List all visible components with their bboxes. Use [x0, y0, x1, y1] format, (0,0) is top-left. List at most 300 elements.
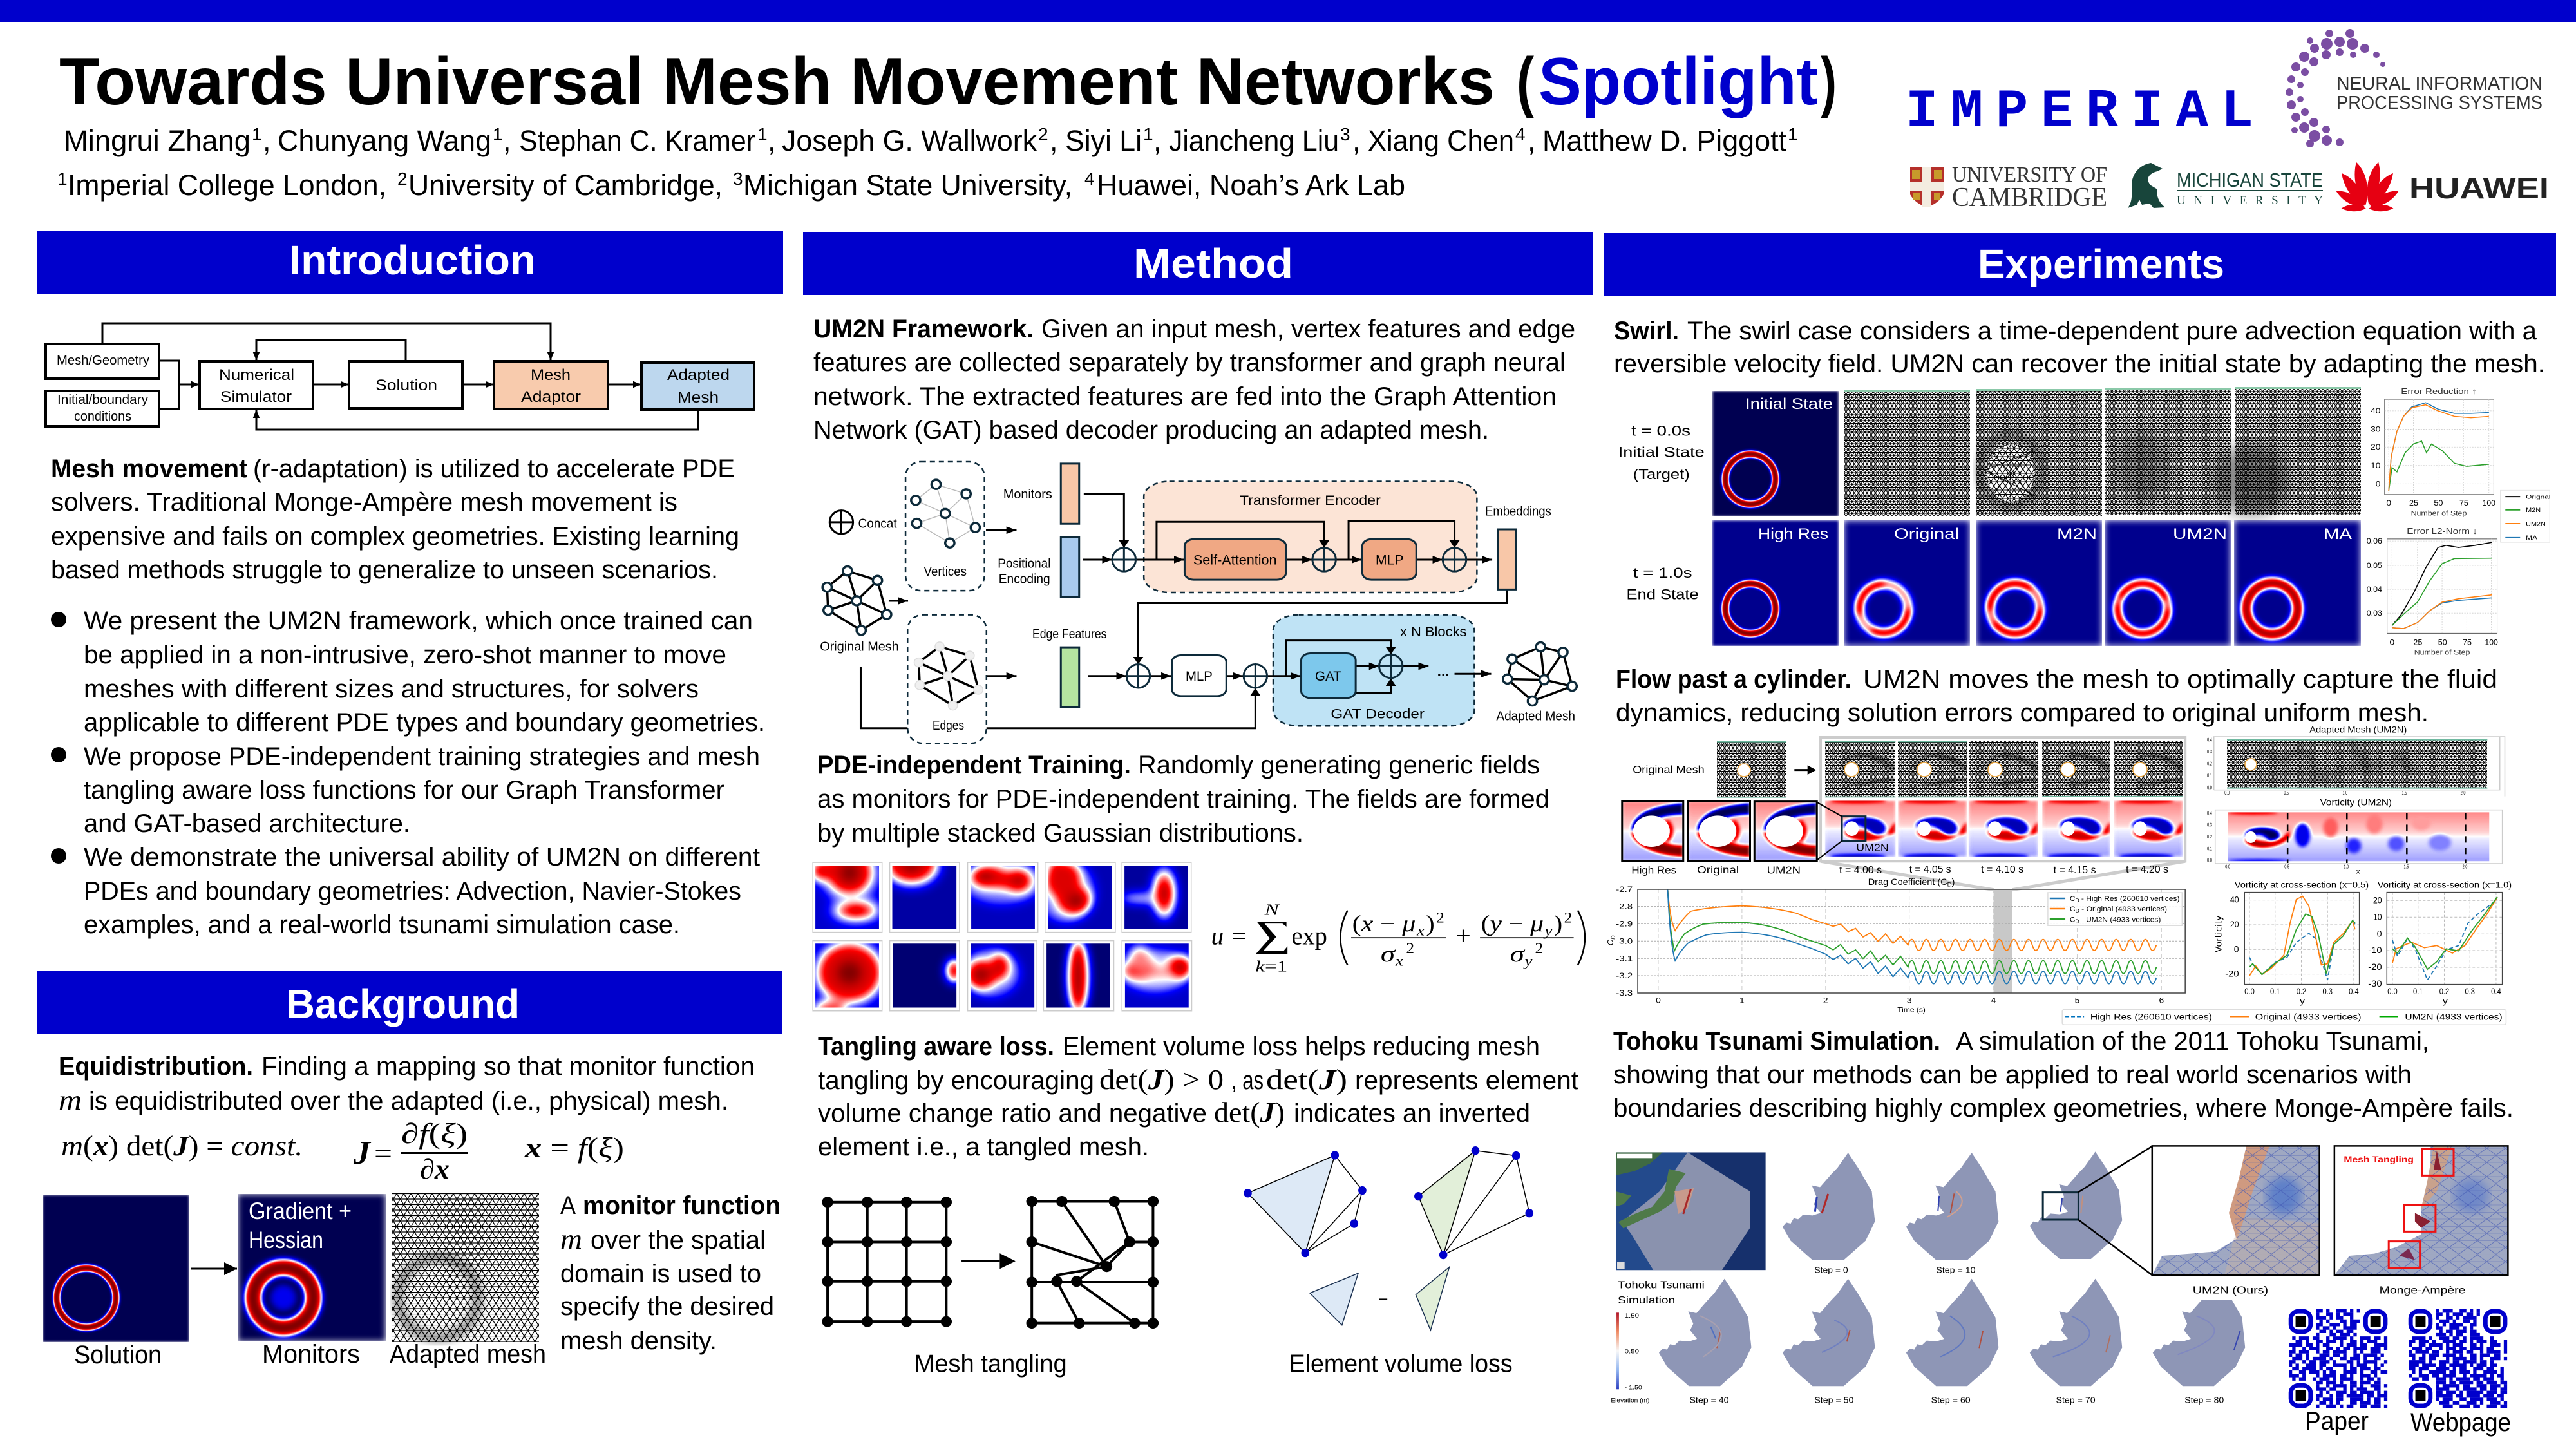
- diagram: mesh movement pipeline: conditions: [74, 410, 131, 424]
- diagram: mesh tangling: Mesh tangling: [914, 1349, 1067, 1378]
- row labels: Initial State: [1618, 444, 1705, 460]
- text block: PDE-independent training: PDE-independent Training.: [817, 751, 1131, 779]
- text block: mesh movement intro: [51, 455, 739, 584]
- equation: stacked Gaussian: 2: [1406, 940, 1414, 957]
- chart: vorticity at x=1.0: 20: [2373, 895, 2382, 905]
- map: Japan domain: [1616, 1152, 1766, 1270]
- chart: vorticity at x=1.0: y: [2443, 996, 2448, 1006]
- vorticity snapshots: [1825, 799, 2183, 858]
- text block: mesh movement intro: (r-adaptation) is utilized to accelerate PDE: [253, 455, 735, 483]
- chart: error L2 norm: 0.05: [2367, 561, 2382, 570]
- text block: Tohoku tsunami: [1613, 1027, 2514, 1122]
- diagram labels: x N Blocks: [1400, 625, 1467, 639]
- affiliations: 3: [733, 169, 743, 189]
- text block: UM2N framework: features are collected separately by transformer and graph neural: [813, 348, 1566, 377]
- panel: Monge-Ampere zoom: [2334, 1146, 2508, 1296]
- image row: swirl end states: High Res: [1758, 526, 1828, 543]
- equation: stacked Gaussian: 2: [1436, 909, 1444, 926]
- chart: vorticity at x=0.5: -20: [2225, 969, 2239, 979]
- step labels: Step = 60: [1931, 1396, 1971, 1405]
- equation: stacked Gaussian: 2: [1564, 909, 1572, 926]
- chart: error reduction: 20: [2371, 442, 2380, 451]
- figures: tsunami simulation: Elevation (m): [1611, 1397, 1649, 1404]
- chart: drag coefficient: -3.3: [1616, 989, 1633, 998]
- image: monitors field: Hessian: [249, 1227, 323, 1253]
- snapshot labels: Original: [1697, 864, 1739, 876]
- authors: ,: [768, 124, 776, 157]
- text block: swirl: [1614, 317, 2545, 378]
- authors: 1: [252, 124, 262, 144]
- chart: vorticity at x=0.5: 0.4: [2349, 987, 2359, 996]
- plot: vorticity long domain: 2.0: [2463, 864, 2467, 869]
- text block: UM2N framework: network. The extracted features are fed into the Graph Attention: [813, 383, 1557, 411]
- diagram: mesh movement pipeline: Adapted: [667, 366, 730, 384]
- text block: contribution bullets: meshes with different sizes and structures, for solvers: [84, 675, 699, 703]
- plot: adapted mesh long domain: 0.1: [2207, 773, 2212, 779]
- logo: Michigan State: MICHIGAN STATE: [2177, 169, 2323, 191]
- icon: original mesh: Original Mesh: [820, 640, 899, 654]
- chart: drag coefficient: 4: [1991, 996, 1996, 1005]
- figures and charts: flow past a cylinder: UM2N: [1856, 842, 1889, 853]
- QR code: webpage: Webpage: [2410, 1408, 2511, 1437]
- text block: UM2N framework: UM2N Framework.: [813, 315, 1034, 343]
- heading: Introduction: [37, 231, 783, 294]
- plot: vorticity long domain: 0.1: [2207, 846, 2212, 851]
- plot: adapted mesh long domain: 0.0: [2207, 784, 2212, 790]
- image row: swirl meshes: [1844, 387, 2361, 516]
- text block: tangling aware loss: [818, 1032, 1578, 1161]
- chart: drag coefficient: D: [2075, 918, 2079, 924]
- plot: adapted mesh long domain: Adapted Mesh (UM2N): [2309, 724, 2407, 735]
- plot: vorticity long domain: 0.5: [2284, 864, 2289, 869]
- text block: flow past a cylinder: dynamics, reducing solution errors compared to original uniform mesh.: [1616, 699, 2429, 727]
- row labels: t = 0.0s: [1631, 423, 1690, 439]
- chart: vorticity at x=0.5: 40: [2230, 895, 2239, 905]
- chart: drag coefficient: -2.7: [1616, 885, 1633, 894]
- chart: vorticity at x=1.0: 0: [2377, 929, 2382, 939]
- equations: equidistribution: [61, 1118, 624, 1185]
- text block: PDE-independent training: as monitors for PDE-independent training. The fields are formed: [817, 785, 1549, 813]
- chart: drag coefficient: C: [1605, 940, 1615, 945]
- figures and charts: flow past a cylinder: - Original (4933 vertices): [2079, 905, 2167, 913]
- diagram: element volume loss: Element volume loss: [1289, 1349, 1513, 1378]
- authors: Joseph G. Wallwork: [782, 124, 1037, 157]
- authors: ,: [1528, 124, 1536, 157]
- equation: stacked Gaussian: x: [1395, 952, 1403, 969]
- diagram labels: Embeddings: [1485, 504, 1551, 518]
- title: ): [1821, 44, 1837, 119]
- text block: mesh movement intro: Mesh movement: [51, 455, 247, 483]
- heading: Background: [37, 971, 782, 1034]
- chart: vorticity at x=1.0: -30: [2368, 979, 2382, 989]
- equation: stacked Gaussian: y: [1543, 922, 1553, 939]
- text block: swirl: reversible velocity field. UM2N can recover the initial state by adapting the mesh.: [1614, 350, 2545, 378]
- panel: transformer encoder: [1144, 481, 1477, 592]
- logo: Imperial: IMPERIAL: [1906, 82, 2253, 143]
- diagram labels: Monitors: [1003, 488, 1052, 502]
- equation: stacked Gaussian: (x − μ: [1352, 911, 1416, 936]
- chart: vorticity at x=0.5: 0.0: [2244, 987, 2255, 996]
- authors: Chunyang Wang: [278, 124, 491, 157]
- text block: monitor function: domain is used to: [560, 1260, 761, 1288]
- chart: drag coefficient: C: [2070, 895, 2085, 903]
- diagram: mesh movement pipeline: [46, 323, 754, 430]
- chart: error reduction: 10: [2371, 461, 2380, 469]
- chart: vorticity at x=0.5: Vorticity: [2214, 915, 2224, 952]
- chart: error L2 norm: 100: [2485, 638, 2498, 647]
- icon: concat symbol: [829, 511, 897, 534]
- text block: contribution bullets: be applied in a non-intrusive, zero-shot manner to move: [84, 641, 726, 669]
- chart: vorticity at x=1.0: 10: [2373, 912, 2382, 922]
- arrows and connections: [860, 494, 1507, 728]
- QR code: webpage: [2409, 1311, 2511, 1437]
- text block: contribution bullets: PDEs and boundary geometries: Advection, Navier-Stokes: [84, 877, 741, 905]
- snapshot labels: t = 4.15 s: [2054, 864, 2096, 876]
- image: monitors field: Monitors: [262, 1340, 360, 1368]
- affiliations: Michigan State University,: [743, 169, 1072, 202]
- chart: error reduction: 40: [2371, 406, 2380, 415]
- text block: contribution bullets: We demonstrate the universal ability of UM2N on different: [84, 843, 760, 871]
- snapshot labels: High Res: [1631, 865, 1676, 876]
- chart legend: cross sections: Original (4933 vertices): [2255, 1012, 2362, 1022]
- image row: swirl end states: UM2N: [2173, 526, 2227, 543]
- equation: stacked Gaussian: u: [1211, 922, 1224, 951]
- chart: drag coefficient: D: [1610, 935, 1616, 940]
- panel: vertices: [905, 462, 985, 591]
- equations: equidistribution: =: [374, 1137, 392, 1171]
- icon: concat symbol: Concat: [858, 517, 897, 531]
- text block: contribution bullets: tangling aware loss functions for our Graph Transformer: [84, 776, 724, 804]
- equation: stacked Gaussian: [1211, 902, 1585, 976]
- text block: monitor function: [560, 1191, 781, 1355]
- equations: equidistribution: ∂f(ξ): [401, 1118, 468, 1150]
- text block: monitor function: mesh density.: [560, 1327, 717, 1355]
- plot: vorticity long domain: 0.0: [2207, 857, 2212, 863]
- equation: stacked Gaussian: exp: [1291, 922, 1327, 951]
- text block: Tohoku tsunami: showing that our methods can be applied to real world scenarios with: [1613, 1061, 2412, 1089]
- diagram: mesh movement pipeline: Mesh: [677, 389, 719, 406]
- authors: 2: [1038, 124, 1048, 144]
- authors: ,: [1050, 124, 1058, 157]
- row labels: [1618, 423, 1705, 603]
- authors: [64, 124, 1798, 157]
- frame: time snapshots: [1821, 737, 2185, 861]
- chart: vorticity at x=0.5: 20: [2230, 920, 2239, 929]
- plot: adapted mesh long domain: [2207, 724, 2505, 797]
- text block: mesh movement intro: expensive and fails on complex geometries. Existing learning: [51, 522, 739, 551]
- chart: drag coefficient: 3: [1907, 996, 1912, 1005]
- vorticity zoom panels: [1622, 801, 1817, 861]
- image: swirl initial state: [1712, 391, 1839, 516]
- diagram labels: Encoding: [999, 573, 1050, 586]
- step labels: Step = 50: [1814, 1396, 1853, 1405]
- text block: monitor function: monitor function: [583, 1191, 781, 1220]
- diagram labels: MLP: [1376, 553, 1403, 568]
- title: Towards Universal Mesh Movement Networks: [59, 44, 1495, 119]
- text block: tangling aware loss: , as: [1231, 1066, 1264, 1095]
- text block: contribution bullets: and GAT-based architecture.: [84, 810, 410, 838]
- text block: PDE-independent training: by multiple stacked Gaussian distributions.: [817, 819, 1303, 848]
- snapshot labels: [1631, 864, 2168, 876]
- image row: flow meshes: [1717, 739, 2487, 797]
- figures: tsunami simulation: Tōhoku Tsunami: [1618, 1280, 1705, 1291]
- icon: adapted mesh: [1496, 643, 1577, 723]
- chart: error L2 norm: 0.03: [2367, 609, 2382, 618]
- logo: Cambridge: CAMBRIDGE: [1952, 183, 2107, 213]
- snapshot labels: t = 4.00 s: [1839, 864, 1882, 876]
- labels and charts: swirl: [1618, 387, 2550, 656]
- text block: equidistribution: Finding a mapping so that monitor function: [261, 1052, 755, 1081]
- chart: error reduction: Number of Step: [2411, 509, 2467, 517]
- affiliations: [57, 169, 1405, 202]
- figures and charts: flow past a cylinder: Original Mesh: [1633, 763, 1705, 775]
- arrow: mesh over time: [1794, 765, 1816, 775]
- colorbar: elevation: 0.50: [1625, 1349, 1639, 1355]
- chart: error reduction: Error Reduction ↑: [2401, 387, 2477, 396]
- text block: monitor function: m: [560, 1224, 582, 1255]
- plot: vorticity long domain: Vorticity (UM2N): [2320, 797, 2392, 808]
- authors: 1: [1788, 124, 1798, 144]
- diagram labels: [998, 488, 1551, 722]
- label: Tohoku simulation: [1618, 1280, 1705, 1306]
- chart: drag coefficient: -3.2: [1616, 971, 1633, 980]
- logo: Cambridge: [1910, 163, 2107, 213]
- step labels: Step = 70: [2056, 1396, 2096, 1405]
- logo: Michigan State: UNIVERSITY: [2177, 194, 2323, 207]
- chart: error L2 norm: [2367, 527, 2498, 656]
- plot: vorticity long domain: 0.3: [2207, 822, 2212, 828]
- text block: tangling aware loss: tangling by encouraging: [818, 1066, 1094, 1095]
- authors: Xiang Chen: [1368, 124, 1514, 157]
- authors: Stephan C. Kramer: [519, 124, 755, 157]
- text block: equidistribution: is equidistributed over the adapted (i.e., physical) mesh.: [89, 1087, 728, 1115]
- diagram labels: Positional: [998, 556, 1050, 571]
- chart: error reduction: 0: [2386, 498, 2391, 507]
- diagram: UM2N architecture: [820, 462, 1577, 743]
- tsunami snapshots: [1659, 1151, 2245, 1386]
- affiliations: 2: [397, 169, 408, 189]
- text block: tangling aware loss: det( J): [1266, 1064, 1347, 1095]
- equations: equidistribution: m(x) det(J) = const.: [61, 1130, 303, 1162]
- chart legend: cross sections: High Res (260610 vertices): [2090, 1012, 2212, 1022]
- plot: adapted mesh long domain: 0.4: [2207, 737, 2212, 743]
- diagram: mesh movement pipeline: Numerical: [219, 366, 294, 384]
- step labels: Step = 10: [1936, 1265, 1975, 1274]
- text block: tangling aware loss: Tangling aware loss.: [818, 1032, 1054, 1061]
- chart: error L2 norm: 0: [2389, 638, 2394, 647]
- row labels: t = 1.0s: [1633, 565, 1692, 581]
- text block: monitor function: specify the desired: [560, 1293, 774, 1321]
- diagram: mesh movement pipeline: Adaptor: [521, 388, 581, 406]
- authors: ,: [263, 124, 271, 157]
- zoom box and connectors: [2043, 1146, 2152, 1275]
- text block: UM2N framework: [813, 315, 1575, 444]
- step labels: [1689, 1265, 2224, 1405]
- affiliations: Imperial College London,: [68, 169, 386, 202]
- chart: drag coefficient: D: [2076, 908, 2079, 914]
- equations: equidistribution: ∂x: [420, 1153, 450, 1185]
- panel: Monge-Ampere zoom: Mesh Tangling: [2344, 1155, 2414, 1164]
- plot: vorticity long domain: [2207, 797, 2503, 875]
- text block: contribution bullets: examples, and a real-world tsunami simulation case.: [84, 911, 680, 939]
- authors: ,: [1352, 124, 1361, 157]
- image: adapted mesh: [390, 1193, 546, 1368]
- equations: equidistribution: x = f(ξ): [524, 1132, 624, 1164]
- text block: contribution bullets: [51, 607, 765, 939]
- step labels: Step = 40: [1689, 1396, 1729, 1405]
- heading: Background: Background: [286, 981, 520, 1027]
- chart legend: UM2N: [2526, 520, 2546, 527]
- text block: tangling aware loss: indicates an inverted: [1294, 1099, 1530, 1128]
- chart: error L2 norm: 0.06: [2367, 536, 2382, 545]
- authors: 3: [1340, 124, 1350, 144]
- arrow: solution to monitors: [191, 1267, 237, 1270]
- chart: error reduction: 50: [2434, 498, 2443, 507]
- label: Tohoku simulation: Simulation: [1618, 1294, 1675, 1306]
- heading: Experiments: [1604, 233, 2556, 296]
- text block: flow past a cylinder: Flow past a cylinder.: [1616, 665, 1852, 694]
- affiliations: 4: [1084, 169, 1095, 189]
- equation: stacked Gaussian: +: [1455, 922, 1471, 951]
- chart: drag coefficient: 1: [1739, 996, 1745, 1005]
- image: monitors field: [238, 1194, 386, 1368]
- logo: Michigan State: [2128, 163, 2323, 208]
- frame connectors: [1821, 861, 2185, 890]
- diagram labels: MLP: [1186, 668, 1213, 684]
- diagram: mesh movement pipeline: Simulator: [220, 388, 292, 406]
- chart: drag coefficient: C: [2070, 905, 2085, 913]
- row labels: End State: [1627, 587, 1699, 603]
- text block: Tohoku tsunami: Tohoku Tsunami Simulation.: [1613, 1027, 1940, 1056]
- chart: error L2 norm: 0.04: [2367, 585, 2382, 594]
- chart: vorticity at x=1.0: 0.4: [2491, 987, 2501, 996]
- equation: stacked Gaussian: σ: [1510, 942, 1526, 967]
- zoom indicator: [1817, 802, 1889, 860]
- authors: Matthew D. Piggott: [1542, 124, 1786, 157]
- plot: adapted mesh long domain: 1.0: [2342, 790, 2347, 796]
- authors: ,: [1153, 124, 1162, 157]
- text block: flow past a cylinder: [1616, 665, 2497, 727]
- text block: contribution bullets: applicable to different PDE types and boundary geometries.: [84, 708, 765, 737]
- text block: swirl: The swirl case considers a time-dependent pure advection equation with a: [1687, 317, 2537, 345]
- panel: UM2N zoom: [2152, 1146, 2320, 1296]
- plot: adapted mesh long domain: 1.5: [2402, 790, 2407, 796]
- chart: drag coefficient: -2.9: [1616, 919, 1633, 928]
- plot: vorticity long domain: 0.0: [2225, 864, 2230, 869]
- chart legend: MA: [2526, 535, 2537, 542]
- teal mesh edges: [1717, 739, 2487, 798]
- chart: error reduction: 75: [2459, 498, 2468, 507]
- plot: vorticity long domain: 1.0: [2344, 864, 2349, 869]
- text block: Tohoku tsunami: boundaries describing highly complex geometries, where Monge-Ampère fails.: [1613, 1094, 2514, 1122]
- affiliations: 1: [57, 169, 68, 189]
- colorbar: elevation: [1611, 1312, 1649, 1404]
- diagram: element volume loss: [1244, 1146, 1533, 1378]
- equation: stacked Gaussian: k=1: [1255, 958, 1287, 976]
- text block: swirl: Swirl.: [1614, 317, 1679, 345]
- figures and charts: flow past a cylinder: t = 4.20 s: [2126, 864, 2168, 875]
- chart: error L2 norm: 75: [2463, 638, 2472, 647]
- panel: vertices: Vertices: [924, 565, 967, 579]
- chart: vorticity at x=0.5: 0.1: [2270, 987, 2280, 996]
- text block: tangling aware loss: element i.e., a tangled mesh.: [818, 1133, 1149, 1161]
- plot: vorticity long domain: x: [2356, 867, 2360, 875]
- text block: flow past a cylinder: UM2N moves the mesh to optimally capture the fluid: [1863, 665, 2497, 694]
- chart: drag coefficient: C: [2070, 916, 2085, 923]
- authors: ,: [503, 124, 511, 157]
- authors: 1: [757, 124, 768, 144]
- panel: GAT decoder: [1273, 615, 1474, 726]
- chart: error reduction: 30: [2371, 424, 2380, 433]
- text block: contribution bullets: We propose PDE-independent training strategies and mesh: [84, 743, 760, 771]
- text block: tangling aware loss: represents element: [1355, 1066, 1578, 1095]
- figures: tsunami simulation: Step = 80: [2184, 1396, 2224, 1405]
- chart legend: cross sections: [2062, 1009, 2506, 1025]
- chart: drag coefficient: 0: [1656, 996, 1661, 1005]
- authors: Jiancheng Liu: [1169, 124, 1339, 157]
- text block: equidistribution: m: [59, 1084, 82, 1116]
- chart: error reduction: 25: [2409, 498, 2418, 507]
- chart: vorticity at x=0.5: 0: [2234, 944, 2239, 954]
- equation: stacked Gaussian: 2: [1535, 940, 1543, 957]
- image row: swirl end states: M2N: [2057, 526, 2097, 543]
- authors: 4: [1515, 124, 1526, 144]
- chart: drag coefficient: ): [1952, 877, 1955, 887]
- snapshot labels: t = 4.10 s: [1981, 864, 2023, 875]
- affiliations: University of Cambridge,: [408, 169, 723, 202]
- diagram labels: ...: [1437, 664, 1450, 679]
- plot: adapted mesh long domain: 2.0: [2461, 790, 2465, 796]
- chart: vorticity at x=1.0: -10: [2368, 945, 2382, 955]
- tsunami wave marks: [1700, 1191, 2240, 1357]
- chart: error reduction: [2371, 387, 2496, 517]
- concat nodes: [1112, 548, 1466, 688]
- heading: Method: [803, 232, 1593, 295]
- equation: stacked Gaussian: ): [1426, 911, 1435, 936]
- logo: Cambridge: UNIVERSITY OF: [1952, 163, 2107, 187]
- diagram: mesh tangling: [822, 1196, 1159, 1378]
- text block: monitor function: over the spatial: [591, 1226, 766, 1255]
- chart: vorticity at x=1.0: -20: [2368, 962, 2382, 972]
- chart: drag coefficient: 2: [1823, 996, 1828, 1005]
- image row: swirl end states: Original: [1894, 526, 1959, 543]
- text block: tangling aware loss: det(J) > 0: [1099, 1064, 1224, 1095]
- image: solution field: [43, 1195, 189, 1369]
- colorbar: elevation: 1.50: [1625, 1312, 1639, 1319]
- plot: vorticity long domain: 1.5: [2403, 864, 2409, 869]
- chart: drag coefficient: D: [1947, 882, 1952, 888]
- chart: drag coefficient: Time (s): [1897, 1006, 1926, 1014]
- diagram: mesh movement pipeline: Mesh: [531, 366, 571, 384]
- equation: stacked Gaussian: ): [1554, 911, 1562, 936]
- equations: equidistribution: J: [353, 1135, 372, 1171]
- equation: stacked Gaussian: (y − μ: [1481, 911, 1544, 936]
- feature bars: [1061, 464, 1516, 707]
- top banner bar: [0, 0, 2576, 22]
- text block: contribution bullets: We present the UM2N framework, which once trained can: [84, 607, 753, 635]
- QR code: paper: [2289, 1311, 2387, 1435]
- text block: equidistribution: Equidistribution.: [59, 1052, 253, 1081]
- authors: Siyi Li: [1065, 124, 1142, 157]
- chart: vorticity at x=1.0: 0.1: [2413, 987, 2423, 996]
- plot: vorticity long domain: 0.4: [2207, 810, 2212, 816]
- logo: NeurIPS: [2286, 29, 2543, 147]
- figures and charts: flow past a cylinder: - High Res (260610 vertices): [2079, 895, 2179, 903]
- figures and charts: flow past a cylinder: [1605, 724, 2512, 1025]
- equation: stacked Gaussian: x: [1416, 922, 1425, 939]
- panel: edges: Edges: [933, 719, 964, 733]
- title: Spotlight: [1539, 44, 1818, 119]
